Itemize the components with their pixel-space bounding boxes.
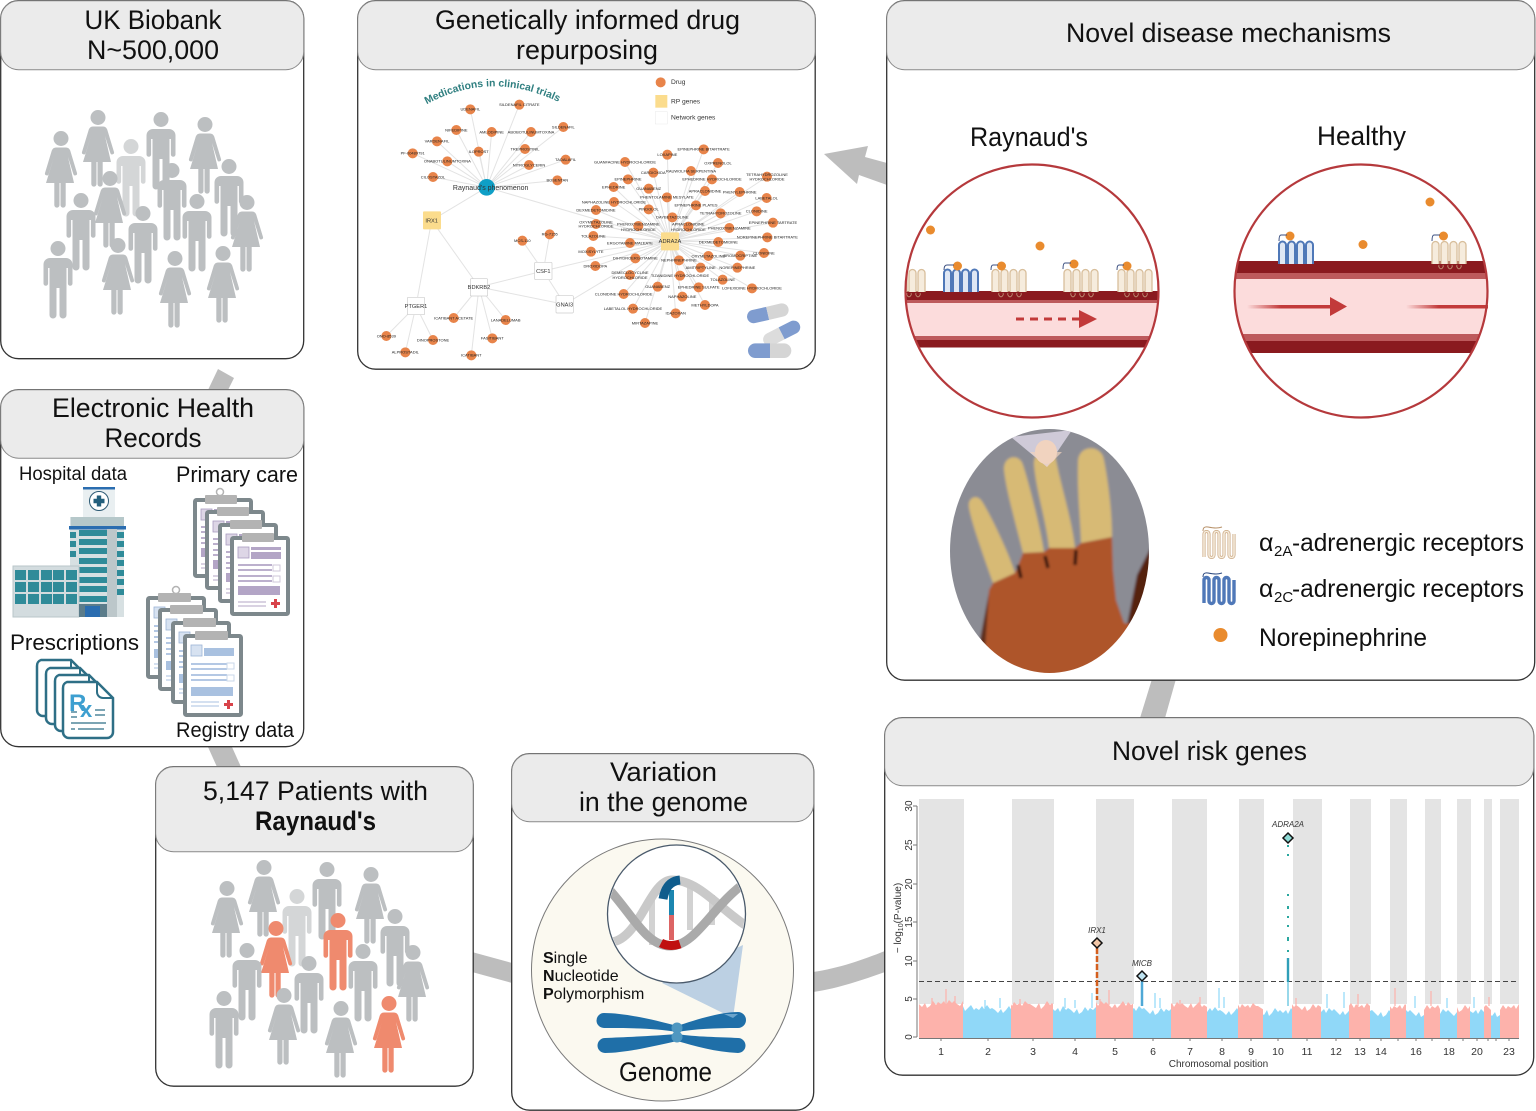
legend: norepinephrine: Norepinephrine <box>1259 624 1427 652</box>
y tick labels: 30 <box>904 800 915 812</box>
reduced flow dashed arrow <box>1016 310 1097 328</box>
peak: MICB <box>1132 959 1153 1006</box>
SNP label: ucleotide <box>555 968 619 985</box>
risk genes header <box>885 718 1534 786</box>
x tick labels: 23 <box>1503 1046 1515 1058</box>
x tick labels: 3 <box>1030 1046 1036 1058</box>
x tick labels <box>938 1046 1515 1058</box>
x tick labels: 20 <box>1471 1046 1483 1058</box>
Hospital data label: Hospital data <box>19 464 127 485</box>
drug labels: TADALAFIL <box>555 157 577 162</box>
Raynaud's label: Raynaud's <box>970 122 1088 152</box>
panel: Electronic Health Records <box>1 390 304 747</box>
DNA magnifier <box>604 845 750 983</box>
drug labels: OXPRENOLOL <box>704 160 733 165</box>
legend: alpha-2A receptor: 2A <box>1274 543 1292 560</box>
y tick labels: 20 <box>904 878 915 890</box>
association signal: pink chromosomes <box>919 1000 1519 1038</box>
Genome label: Genome <box>619 1057 712 1087</box>
SNP label: N <box>543 968 555 985</box>
drug labels: NAPHAZOLINE HYDROCHLORIDE <box>582 199 646 204</box>
UK Biobank header <box>1 1 304 70</box>
disease mechanisms heading text: Novel disease mechanisms <box>1066 18 1391 48</box>
legend: alpha-2C receptor: 2C <box>1274 589 1293 606</box>
drug-gene network diagram <box>376 77 800 360</box>
x axis title: Chromosomal position <box>1169 1059 1268 1070</box>
EHR heading text: Records <box>104 423 202 453</box>
drug labels: EPINEPHRINE TARTRATE <box>749 220 798 225</box>
drug labels: PHENYLEPHRINE <box>723 189 757 194</box>
patients heading text: Raynaud's <box>255 806 376 836</box>
panel: Novel disease mechanisms <box>887 1 1535 690</box>
y axis title: 10 <box>898 923 905 931</box>
panel: Novel risk genes <box>885 718 1534 1075</box>
drug labels: HYDROCHLORIDE <box>579 224 614 229</box>
drug labels: TETRAHYDROZOLINE <box>700 211 742 216</box>
drug labels: HYDROCHLORIDE <box>750 176 785 181</box>
x tick labels: 18 <box>1443 1046 1455 1058</box>
network legend: Network genes <box>671 115 716 122</box>
drug labels: EPINEPHRINE <box>614 177 642 182</box>
drug labels: AMLODIPINE <box>479 129 504 134</box>
drug labels: TREPROSTINIL <box>510 146 540 151</box>
legend: alpha-2A receptor <box>1203 527 1524 560</box>
drug labels: NEPHRINEPHRINE <box>661 258 697 263</box>
x tick labels: 11 <box>1302 1046 1313 1058</box>
network legend: Drug <box>671 79 686 86</box>
EHR header <box>1 390 304 458</box>
icon: registry data clipboards <box>148 586 241 715</box>
zoom cone <box>662 945 743 1018</box>
drug labels: LABETALOL <box>755 195 779 200</box>
y axis title: − log <box>893 931 904 953</box>
peak: ADRA2A <box>1271 820 1304 1006</box>
gene nodes: PTGER1 <box>405 304 427 310</box>
x tick labels: 5 <box>1112 1046 1118 1058</box>
peak: IRX1: IRX1 <box>1088 926 1106 935</box>
x tick labels: 13 <box>1354 1046 1366 1058</box>
drug labels: ALPROSTADIL <box>392 350 420 355</box>
drug labels: MIRTAZAPINE <box>632 320 659 325</box>
legend: alpha-2A receptor: -adrenergic receptors <box>1292 529 1524 557</box>
drug labels: OXYMETAZOLINE <box>579 219 613 224</box>
drug labels: HYDROCHLORIDE <box>671 227 706 232</box>
drug labels: EPHEDRINE SULFATE <box>678 285 720 290</box>
drug labels: DEMECLOCYCLINE <box>612 270 649 275</box>
chromosome grey bands <box>919 799 1519 1004</box>
SNP label: S <box>543 950 554 967</box>
finger gaps <box>1018 550 1076 578</box>
gene nodes: ADRA2A <box>659 239 682 245</box>
x tick labels: 10 <box>1272 1046 1284 1058</box>
drug labels: VARDENAFIL <box>425 139 450 144</box>
x tick labels: 8 <box>1219 1046 1225 1058</box>
EHR heading text: Electronic Health <box>52 393 254 423</box>
sub-threshold spikes <box>932 988 1489 1008</box>
hub: Raynaud's phenomenon: Raynaud's phenomenon <box>453 185 529 192</box>
y tick labels: 5 <box>904 996 915 1002</box>
drug labels: RAUWOLFIA SERPENTINA <box>666 168 716 173</box>
x tick labels: 9 <box>1248 1046 1254 1058</box>
drug labels: EPINEPHRINE PLATES <box>674 203 718 208</box>
drug labels: UDENAFIL <box>460 107 481 112</box>
Healthy vessel circle <box>1230 164 1495 418</box>
panel: Variation in the genome <box>512 754 814 1110</box>
network edges <box>386 105 773 355</box>
x tick labels: 14 <box>1375 1046 1387 1058</box>
Registry data label: Registry data <box>176 719 294 742</box>
network legend: RP genes <box>671 99 701 106</box>
drug nodes <box>381 100 778 360</box>
Healthy label: Healthy <box>1317 121 1406 151</box>
SNP label: P <box>543 986 554 1003</box>
drug labels: AMITRIPTYLINE <box>686 265 716 270</box>
x tick labels: 1 <box>938 1046 944 1058</box>
gene nodes <box>405 211 682 315</box>
SNP label: olymorphism <box>554 986 644 1003</box>
icon: primary care clipboards <box>195 488 288 614</box>
drug labels: HYDROCHLORIDE <box>621 227 656 232</box>
drug labels: EPINEPHRINE BITARTRATE <box>678 147 730 152</box>
drug labels: ONABOTULINUMTOXINA <box>424 159 471 164</box>
dark right-hand edge (thumb of other hand) <box>1126 548 1149 626</box>
drug labels: CLONIDINE <box>753 250 775 255</box>
association signal: blue chromosomes <box>963 1005 1500 1038</box>
variation heading text: Variation <box>610 757 717 787</box>
gene nodes: IRX1 <box>425 218 438 224</box>
drug labels: APRACLONIDINE <box>672 221 705 226</box>
risk genes heading text: Novel risk genes <box>1112 736 1307 766</box>
y tick labels: 0 <box>904 1034 915 1040</box>
drug labels: ERGOTAMINE MALEATE <box>607 240 653 245</box>
genome circle <box>532 839 794 1101</box>
chromosome <box>597 1012 746 1053</box>
panel: UK Biobank <box>1 1 304 359</box>
legend: alpha-2C receptor: -adrenergic receptors <box>1292 575 1524 603</box>
drug labels: PF-00489791 <box>401 151 426 156</box>
tethered norepinephrine on receptors <box>926 226 1132 270</box>
drug labels: GUANFACINE HYDROCHLORIDE <box>594 159 656 164</box>
peak: ADRA2A: ADRA2A <box>1271 820 1304 829</box>
drug labels: GUANABENZ <box>645 284 671 289</box>
drug labels: METHYLDOPA <box>691 302 719 307</box>
panel: 5,147 Patients with Raynaud's <box>156 767 473 1086</box>
y tick labels: 10 <box>904 955 915 967</box>
panel: Genetically informed drug repurposing <box>357 0 816 370</box>
drug labels: NIFEDIPINE <box>445 127 468 132</box>
drug labels: DAYBETAZOLINE <box>656 215 689 220</box>
drug labels: PHENTOLAMINE MESYLATE <box>640 195 694 200</box>
drug labels: RG-7155 <box>542 232 559 237</box>
y tick labels: 15 <box>904 916 915 928</box>
drug labels: ICATIBANT ACETATE <box>434 315 474 320</box>
variation heading text: in the genome <box>579 787 748 817</box>
legend: alpha-2A receptor: α <box>1259 529 1273 557</box>
drug labels: SILDENAFIL <box>552 124 576 129</box>
drug labels <box>377 102 798 358</box>
legend: alpha-2C receptor <box>1203 573 1524 606</box>
drug labels: HYDROCHLORIDE <box>613 275 648 280</box>
drug labels: MCS-110 <box>514 238 531 243</box>
drug repurposing header <box>358 1 815 70</box>
peak: MICB: MICB <box>1132 959 1153 968</box>
SNP label: ingle <box>554 950 588 967</box>
legend: alpha-2C receptor: α <box>1259 575 1273 603</box>
drug labels: DEXMEDETOMIDINE <box>576 207 616 212</box>
drug labels: SILDENAFIL CITRATE <box>499 102 540 107</box>
drug labels: TOLAZOLINE <box>710 277 735 282</box>
drug labels: APRACLONIDINE <box>689 188 722 193</box>
drug labels: BROMOCRIPTINE <box>724 253 757 258</box>
drug labels: LANADELUMAB <box>491 317 521 322</box>
Manhattan plot <box>893 799 1519 1070</box>
disease mechanisms header <box>887 1 1535 70</box>
drug labels: ONO-8539 <box>377 333 397 338</box>
drug labels: NOREPINEPHRINE BITARTRATE <box>737 235 798 240</box>
drug labels: DROXIDOPA <box>584 263 607 268</box>
icon: hospital <box>13 487 126 617</box>
pale fingers <box>969 448 1112 583</box>
photo of Raynaud's hand <box>950 429 1149 673</box>
drug labels: NITROGLYCERIN <box>513 162 545 167</box>
drug labels: LOFEXIDINE HYDROCHLORIDE <box>722 286 782 291</box>
x tick labels: 7 <box>1187 1046 1193 1058</box>
drug labels: PHENOXYBENZAMINE <box>708 225 751 230</box>
drug labels: CLONIDINE HYDROCHLORIDE <box>595 291 653 296</box>
Primary care label: Primary care <box>176 462 298 487</box>
gene nodes: BDKRB2 <box>468 285 490 291</box>
drug labels: FASITIBANT <box>481 336 504 341</box>
drug labels: CILOSTAZOL <box>421 174 446 179</box>
palm and wrist <box>983 536 1130 673</box>
y tick labels: 25 <box>904 839 915 851</box>
drug labels: CLONIDINE <box>746 209 768 214</box>
drug labels: PINDOLOL <box>639 207 660 212</box>
x tick labels: 2 <box>985 1046 991 1058</box>
normal flow arrows <box>1247 297 1488 316</box>
drug labels: PHENOXYBENZAMINE <box>617 221 660 226</box>
drug labels: NOREPINEPHRINE <box>719 265 756 270</box>
drug labels: CARDIOXIDA <box>641 170 666 175</box>
drug repurposing heading text: Genetically informed drug <box>435 5 740 35</box>
drug labels: LABETALOL HYDROCHLORIDE <box>604 306 663 311</box>
y axis title: (P-value) <box>893 883 904 923</box>
UK Biobank heading text: UK Biobank <box>84 5 222 35</box>
drug labels: OXYMETAZOLINE <box>692 253 725 258</box>
x tick labels: 4 <box>1072 1046 1078 1058</box>
drug labels: BOSENTAN <box>547 178 568 183</box>
gene nodes: CSF1 <box>536 269 551 275</box>
drug labels: ABOBOTULINUMTOXINA <box>508 129 555 134</box>
gene nodes: GNAI3 <box>556 302 573 308</box>
drug labels: TOLAZOLINE <box>581 233 606 238</box>
patients heading text: 5,147 Patients with <box>203 776 428 806</box>
icon: prescriptions: R <box>69 690 86 717</box>
icon: prescriptions: x <box>80 697 93 722</box>
drug labels: ILOPROST <box>469 149 489 154</box>
crowd of people <box>44 110 263 328</box>
UK Biobank heading text: N~500,000 <box>87 35 219 65</box>
y tick labels <box>904 800 915 1040</box>
drug labels: ICATIBANT <box>461 353 482 358</box>
significance threshold <box>919 980 1519 982</box>
x tick labels: 6 <box>1150 1046 1156 1058</box>
drug labels: DINOPROSTONE <box>417 337 449 342</box>
icon: prescriptions <box>37 660 113 738</box>
drug labels: GUANABENZ <box>636 186 662 191</box>
pills <box>746 302 803 358</box>
Prescriptions label: Prescriptions <box>10 630 139 655</box>
drug labels: TIZANIDINE HYDROCHLORIDE <box>651 273 709 278</box>
Raynaud's vessel circle <box>891 164 1170 418</box>
network legend <box>655 77 716 124</box>
drug labels: DIHYDROERGOTAMINE <box>613 256 658 261</box>
drug labels: LOXAPINE <box>657 152 678 157</box>
drug labels: TETRAHYDROZOLINE <box>746 172 788 177</box>
drug labels: MOXISYLYTE <box>578 249 604 254</box>
peak: IRX1 <box>1088 926 1106 1000</box>
patients header <box>156 767 473 852</box>
drug labels: EPHEDRINE <box>602 184 626 189</box>
curved caption: Medications in clinical trials <box>424 78 560 104</box>
crowd with affected patients highlighted <box>210 860 429 1078</box>
hub: Raynaud's phenomenon <box>453 179 529 196</box>
x tick labels: 12 <box>1330 1046 1342 1058</box>
drug labels: DEXMEDETOMIDINE <box>699 239 738 244</box>
arrowhead pointing to drug repurposing <box>824 146 887 185</box>
axis <box>913 806 1519 1041</box>
drug repurposing heading text: repurposing <box>516 35 658 65</box>
drug labels: EPHEDRINE HYDROCHLORIDE <box>682 177 742 182</box>
x tick labels: 16 <box>1410 1046 1422 1058</box>
drug labels: IDAZOXAN <box>665 311 686 316</box>
connecting arrow bands <box>208 146 1176 992</box>
drug labels: NAPHAZOLINE <box>668 294 697 299</box>
variation header <box>512 754 814 822</box>
